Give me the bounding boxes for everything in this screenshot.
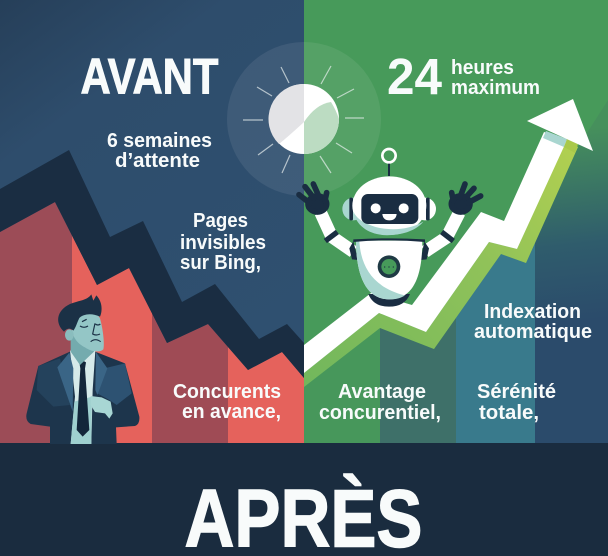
heading: 24 hours maximum <box>387 48 540 105</box>
chart: falling dark zigzag line <box>0 150 304 378</box>
panel: après background <box>304 0 608 443</box>
man: lapel left <box>57 353 73 412</box>
man: jacket highlight <box>97 363 132 405</box>
text: total serenity: Sérénité <box>477 381 556 403</box>
robot: right hand <box>451 184 481 212</box>
man: suit <box>26 352 139 444</box>
chart: rising bars <box>380 100 608 443</box>
robot: left hand <box>299 184 327 212</box>
robot: visor <box>361 194 418 224</box>
man: tie <box>77 361 89 437</box>
robot: eyes <box>371 203 381 213</box>
man: hair <box>58 294 102 332</box>
robot: chest button <box>378 255 400 278</box>
heading: 24 hours maximum: maximum <box>451 77 540 99</box>
man: eyes, nose and mouth <box>80 319 101 342</box>
man: ear <box>65 329 74 341</box>
heading: 24 hours maximum: 24 <box>387 48 443 105</box>
chart: falling red bars <box>0 190 304 443</box>
text: invisible pages: sur Bing, <box>180 252 261 274</box>
text: competitors ahead <box>173 381 281 423</box>
text: total serenity <box>477 381 556 424</box>
robot: antenna <box>382 149 396 176</box>
icon: sun <box>227 42 381 196</box>
heading: 24 hours maximum: heures <box>451 57 514 79</box>
text: total serenity: totale, <box>479 402 539 424</box>
heading: avant: AVANT <box>80 48 218 104</box>
text: six weeks wait: 6 semaines <box>107 130 212 152</box>
text: competitive advantage <box>319 381 441 424</box>
text: competitive advantage: Avantage <box>338 381 426 403</box>
man: neck <box>71 335 94 365</box>
robot: ears <box>342 198 436 220</box>
text: automatic indexing: automatique <box>474 321 592 343</box>
robot: left arm <box>321 213 358 260</box>
man: hand <box>91 396 113 419</box>
text: six weeks wait: d’attente <box>115 150 200 172</box>
chart: rising arrow <box>304 99 593 387</box>
text: six weeks wait <box>107 130 212 172</box>
text: competitive advantage: concurentiel, <box>319 402 441 424</box>
robot: head <box>352 176 426 235</box>
footer band <box>0 443 608 556</box>
text: automatic indexing: Indexation <box>484 301 581 323</box>
text: invisible pages <box>180 210 266 274</box>
man: shirt <box>70 351 95 444</box>
man: lapel right <box>95 352 107 395</box>
robot: base <box>368 294 410 307</box>
text: invisible pages: invisibles <box>180 232 266 254</box>
text: competitors ahead: en avance, <box>182 401 281 423</box>
robot: smile <box>382 214 397 220</box>
icon: worried man in suit <box>26 294 139 444</box>
text: automatic indexing <box>474 301 592 343</box>
icon: happy robot <box>299 149 481 307</box>
robot: right arm <box>421 213 459 260</box>
text: invisible pages: Pages <box>193 210 248 232</box>
robot: body <box>353 238 425 299</box>
panel: avant background <box>0 0 304 443</box>
man: face <box>72 312 104 351</box>
text: competitors ahead: Concurents <box>173 381 281 403</box>
